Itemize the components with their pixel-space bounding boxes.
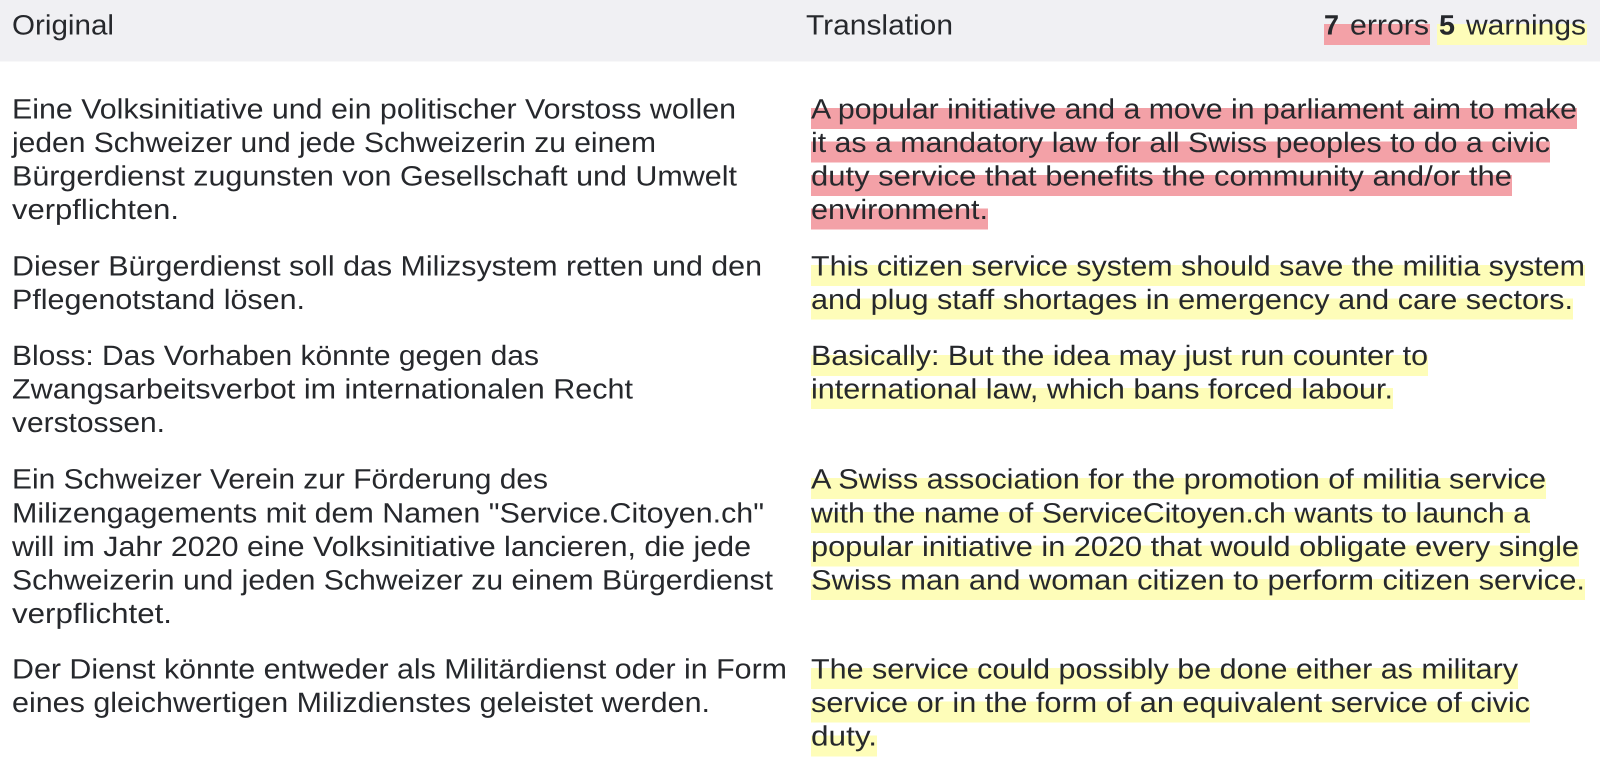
translation paragraph 4 with warning highlight: with the name of ServiceCitoyen.ch wants to launch a <box>810 498 1530 528</box>
translation paragraph 2 with warning highlight: This citizen service system should save the militia system <box>811 250 1585 282</box>
translation paragraph 5 with warning highlight: The service could possibly be done either as military <box>811 654 1518 684</box>
translation paragraph 1 with error highlight: A popular initiative and a move in parliament aim to make <box>811 94 1577 124</box>
column heading: original: Original <box>12 10 114 40</box>
original paragraph 5: eines gleichwertigen Milizdienstes geleistet werden. <box>12 687 710 718</box>
original paragraph 3 <box>12 340 633 438</box>
warning count badge: 5 <box>1439 10 1455 40</box>
header bar <box>0 0 1600 62</box>
translation paragraph 5 with warning highlight: service or in the form of an equivalent service of civic <box>811 687 1530 718</box>
original paragraph 1: Eine Volksinitiative und ein politischer Vorstoss wollen <box>12 94 736 124</box>
translation paragraph 3 with warning highlight <box>811 340 1428 409</box>
translation paragraph 1 with error highlight: duty service that benefits the community and/or the <box>811 160 1512 192</box>
translation paragraph 4 with warning highlight: A Swiss association for the promotion of militia service <box>811 464 1546 494</box>
original paragraph 4: Milizengagements mit dem Namen "Service.Citoyen.ch" <box>12 498 764 528</box>
original paragraph 2: Dieser Bürgerdienst soll das Milizsystem retten und den <box>12 250 762 282</box>
translation paragraph 3 with warning highlight: Basically: But the idea may just run counter to <box>811 340 1428 371</box>
original paragraph 5 <box>12 654 787 718</box>
error count badge: 7 <box>1324 10 1339 40</box>
translation paragraph 1 with error highlight: environment. <box>811 194 988 225</box>
column heading: translation: Translation <box>806 10 953 40</box>
original paragraph 5: Der Dienst könnte entweder als Militärdienst oder in Form <box>12 654 787 684</box>
translation paragraph 4 with warning highlight: Swiss man and woman citizen to perform citizen service. <box>811 564 1585 596</box>
original paragraph 4: Ein Schweizer Verein zur Förderung des <box>12 464 548 494</box>
original paragraph 4: verpflichtet. <box>12 598 172 629</box>
original paragraph 1: Bürgerdienst zugunsten von Gesellschaft und Umwelt <box>12 160 737 192</box>
translation paragraph 4 with warning highlight: popular initiative in 2020 that would obligate every single <box>811 531 1579 562</box>
error count badge <box>1324 10 1430 45</box>
translation paragraph 3 with warning highlight: international law, which bans forced labour. <box>811 374 1393 404</box>
warning count badge <box>1437 10 1587 45</box>
original paragraph 3: Bloss: Das Vorhaben könnte gegen das <box>12 340 539 371</box>
original paragraph 4: Schweizerin und jeden Schweizer zu einem Bürgerdienst <box>12 564 773 596</box>
translation paragraph 4 with warning highlight <box>810 464 1585 600</box>
original paragraph 1: verpflichten. <box>12 194 179 225</box>
original paragraph 3: Zwangsarbeitsverbot im internationalen Recht <box>12 374 633 404</box>
translation paragraph 2 with warning highlight: and plug staff shortages in emergency and care sectors. <box>811 284 1573 315</box>
translation paragraph 5 with warning highlight <box>811 654 1530 756</box>
original paragraph 3: verstossen. <box>12 407 165 438</box>
translation paragraph 2 with warning highlight <box>811 250 1585 320</box>
original paragraph 2 <box>12 250 762 315</box>
translation paragraph 1 with error highlight: it as a mandatory law for all Swiss peoples to do a civic <box>811 127 1550 158</box>
translation paragraph 5 with warning highlight: duty. <box>811 720 877 752</box>
original paragraph 4 <box>11 464 773 629</box>
original paragraph 1 <box>11 94 737 225</box>
original paragraph 2: Pflegenotstand lösen. <box>12 284 305 315</box>
original paragraph 1: jeden Schweizer und jede Schweizerin zu einem <box>11 127 656 158</box>
error count badge: errors <box>1350 10 1429 40</box>
translation paragraph 1 with error highlight <box>811 94 1577 230</box>
warning count badge: warnings <box>1465 10 1586 40</box>
original paragraph 4: will im Jahr 2020 eine Volksinitiative lancieren, die jede <box>11 531 751 562</box>
